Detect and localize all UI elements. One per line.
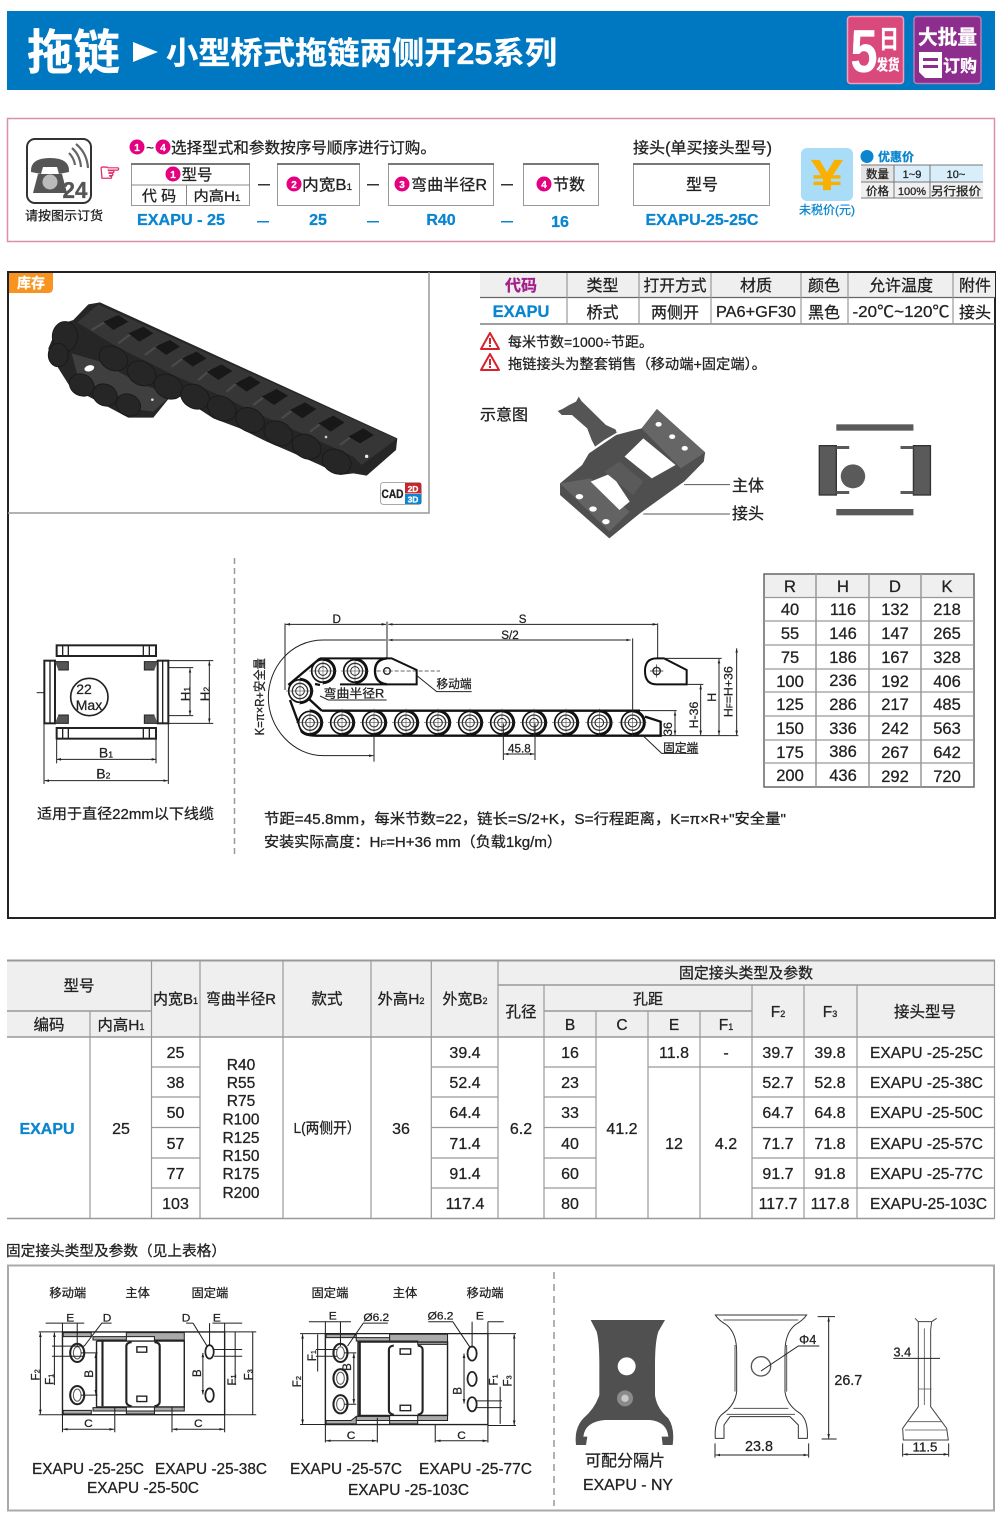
size table R H D K: 386 — [829, 743, 857, 761]
specification table: 附件 — [959, 277, 991, 295]
table body text: 117.8 — [811, 1196, 850, 1213]
table body text: 23 — [561, 1075, 579, 1092]
table body text: 77 — [167, 1166, 184, 1183]
instruction line: 4 — [160, 143, 166, 154]
size table R H D K: 55 — [781, 625, 799, 643]
table body text: 103 — [162, 1196, 189, 1213]
note 2 with warning icon: 拖链接头为整套销售（移动端+固定端）。 — [508, 356, 766, 372]
size table R H D K: 406 — [933, 673, 961, 691]
note 1 with warning icon: 每米节数=1000÷节距。 — [508, 334, 653, 350]
formula note 2: 安装实际高度：H F=H+36 mm（负载1kg/m） — [264, 834, 562, 851]
connector drawing: two-hole type: F1 — [226, 1374, 239, 1385]
icon: CAD 2D 3D: 3D — [408, 494, 418, 504]
table body text: 64.8 — [814, 1105, 846, 1122]
separator label: 可配分隔片 — [585, 1452, 665, 1470]
cross-section dimension drawing: H2 — [197, 687, 212, 701]
icon: CAD 2D 3D: 2D — [408, 484, 418, 494]
table body text: 91.4 — [449, 1166, 481, 1183]
size table R H D K: 150 — [776, 720, 804, 738]
connector drawing: two-hole type: E — [66, 1312, 74, 1324]
connector models group 1 — [32, 1461, 267, 1497]
step 3 box: bend radius: 3 — [399, 180, 405, 191]
connector heading: 接头(单买接头型号) — [633, 139, 772, 157]
table body text: EXAPU -25-38C — [870, 1075, 983, 1092]
connector drawing: two-hole type: C — [84, 1417, 93, 1430]
connector models group 1: EXAPU -25-38C — [155, 1461, 267, 1478]
table body text: R75 — [227, 1093, 255, 1110]
connector drawing: three-hole type: E — [476, 1310, 484, 1323]
connector drawing: three-hole type: F1 — [306, 1350, 319, 1361]
table body text: EXAPU -25-50C — [870, 1105, 983, 1122]
size table R H D K: 167 — [881, 649, 909, 667]
step 1 box: model — [131, 164, 250, 206]
example values: EXAPU - 25 — [137, 212, 225, 229]
connector drawing: three-hole type: Ø6.2 — [428, 1310, 453, 1323]
table body text: 41.2 — [606, 1121, 638, 1138]
specification table: 类型 — [586, 277, 619, 295]
table body text: R175 — [222, 1166, 260, 1183]
step 1 box: model: 1 — [170, 170, 176, 181]
table body text: 71.7 — [762, 1136, 794, 1153]
step 2 box: inner width — [277, 164, 360, 206]
table header text: 内宽B1 — [153, 991, 198, 1008]
connector drawing: three-hole type: 移动端 — [467, 1286, 503, 1300]
size table R H D K: 132 — [881, 601, 909, 619]
icon: telephone 24h — [27, 139, 91, 203]
table header text: 弯曲半径R — [206, 991, 276, 1008]
table body text: EXAPU -25-57C — [870, 1136, 983, 1153]
step 4 box: link count: 4 — [541, 180, 547, 191]
size table R H D K: 267 — [881, 744, 909, 762]
arrow — [133, 42, 158, 62]
connector drawing: two-hole type: C — [194, 1417, 203, 1430]
schematic label: 示意图 — [480, 405, 528, 424]
table header text: F3 — [823, 1004, 837, 1021]
table body text: 4.2 — [715, 1136, 737, 1153]
table header text: 编码 — [33, 1016, 65, 1034]
table body text: R40 — [227, 1057, 256, 1074]
size table R H D K: 242 — [881, 720, 909, 738]
table body text: EXAPU — [19, 1121, 75, 1138]
specification table: 颜色 — [808, 277, 840, 295]
table body text: L(两侧开） — [294, 1120, 360, 1137]
connector drawing: three-hole type: F1 — [488, 1374, 501, 1385]
size table R H D K: 642 — [933, 744, 961, 762]
connector drawing: two-hole type: 固定端 — [191, 1285, 228, 1300]
table header text: 型号 — [63, 977, 95, 995]
chain side view dimension drawing: S/2 — [501, 629, 519, 642]
table body text: 39.8 — [814, 1045, 846, 1062]
step 3 box: bend radius: 弯曲半径R — [411, 176, 487, 194]
table header text: 孔距 — [633, 991, 663, 1008]
table body text — [19, 1045, 987, 1213]
exploded connector illustration — [558, 397, 730, 538]
table body text: 117.7 — [759, 1196, 798, 1213]
table body text: 11.8 — [659, 1045, 689, 1062]
discount table: 1~9 — [903, 169, 921, 181]
chain side view dimension drawing: S — [519, 613, 527, 626]
chain side view dimension drawing — [252, 613, 738, 762]
table body text: 64.7 — [762, 1105, 794, 1122]
cross-section dimension drawing: B2 — [96, 766, 111, 782]
size table R H D K: 336 — [829, 720, 857, 738]
discount table: 价格 — [866, 184, 889, 198]
specification table: 打开方式 — [644, 277, 706, 295]
dash — [258, 184, 270, 186]
size table R H D K: 75 — [781, 649, 799, 667]
separator label: EXAPU - NY — [583, 1477, 673, 1494]
step 1 box: model: 型号 — [181, 166, 213, 184]
chain side view dimension drawing: H-36 — [687, 702, 701, 728]
product photo frame — [8, 272, 429, 513]
size table R H D K: 217 — [881, 696, 909, 714]
step 4 box: link count — [523, 164, 599, 206]
example values: 16 — [551, 214, 569, 231]
step 3 box: bend radius — [388, 164, 494, 206]
size table R H D K: 200 — [776, 767, 804, 785]
example values: 25 — [309, 212, 327, 229]
table header text: B — [565, 1017, 575, 1034]
size table R H D K: 192 — [881, 673, 909, 691]
table body text: EXAPU -25-25C — [870, 1045, 983, 1062]
badge: bulk order — [914, 16, 981, 84]
table body text: 52.4 — [449, 1075, 481, 1092]
badge: 5 day delivery: 日 — [879, 26, 899, 54]
connector drawing: two-hole type: D — [103, 1312, 111, 1324]
badge: bulk order: 大批量 — [918, 26, 977, 49]
connector models group 2: EXAPU -25-57C — [290, 1461, 402, 1478]
label: body: 主体 — [732, 477, 764, 495]
size table R H D K: 116 — [830, 601, 856, 619]
separator label — [583, 1452, 673, 1494]
size table R H D K: 100 — [776, 673, 804, 691]
chain side view dimension drawing: 弯曲半径R — [324, 686, 384, 700]
size table R H D K: 236 — [829, 672, 857, 690]
step 4 box: link count: 节数 — [553, 176, 585, 194]
table body text: 12 — [665, 1136, 683, 1153]
cross-section dimension drawing — [37, 645, 213, 784]
tax-excluded label: 未税价(元) — [799, 203, 855, 217]
size table R H D K: 125 — [776, 696, 804, 714]
specification table: 黑色 — [808, 304, 840, 322]
table body text: 60 — [561, 1166, 579, 1183]
icon: yen price: ¥ — [811, 151, 844, 200]
table body text: 25 — [167, 1045, 184, 1062]
discount table — [860, 149, 983, 198]
size table R H D K — [764, 574, 974, 787]
connector drawing: two-hole type: B — [191, 1369, 204, 1377]
connector drawing: three-hole type: Ø6.2 — [363, 1311, 389, 1324]
size table R H D K: 292 — [881, 768, 909, 786]
header banner — [7, 11, 995, 90]
table body text: EXAPU -25-77C — [870, 1166, 983, 1183]
connector drawing: three-hole type: 主体 — [393, 1286, 417, 1300]
step 1 box: model: 内高H 1 — [194, 188, 240, 204]
size table R H D K: 40 — [781, 601, 799, 619]
connector model box — [633, 164, 770, 206]
table header text: 内高H1 — [98, 1017, 144, 1034]
connector drawing: two-hole type: F2 — [29, 1369, 42, 1380]
stock tag: 库存 — [17, 275, 45, 291]
size table R H D K: 175 — [776, 744, 804, 762]
chain side view dimension drawing: 45.8 — [508, 742, 531, 755]
size table R H D K: 720 — [933, 768, 961, 786]
separator side view drawing: 11.5 — [913, 1440, 937, 1455]
subtitle: 小型桥式拖链两侧开25系列 — [166, 36, 557, 71]
size table R H D K: 436 — [829, 767, 857, 785]
size table R H D K: 485 — [933, 696, 961, 714]
discount table: 数量 — [866, 167, 889, 181]
size table R H D K: 146 — [829, 625, 857, 643]
connector models group 1: EXAPU -25-50C — [87, 1480, 199, 1497]
chain side view dimension drawing: H — [705, 693, 719, 702]
connector models group 2 — [290, 1461, 532, 1499]
table body text: 80 — [561, 1196, 579, 1213]
connector drawing: three-hole type: E — [329, 1310, 337, 1323]
size table R H D K: 286 — [829, 696, 857, 714]
table body text: - — [723, 1045, 729, 1062]
table body text: 39.7 — [762, 1045, 794, 1062]
table body text: 50 — [167, 1105, 184, 1122]
step 1 box: model: 代 码 — [142, 188, 176, 205]
label: connector: 接头 — [732, 505, 764, 523]
table header text: E — [669, 1017, 679, 1034]
connector drawing: two-hole type: E — [213, 1312, 221, 1324]
cable size note: 适用于直径22mm以下线缆 — [37, 806, 214, 823]
separator front view drawing: 26.7 — [834, 1373, 862, 1389]
size table R H D K: 563 — [933, 720, 961, 738]
chain side view dimension drawing: 固定端 — [663, 741, 698, 755]
panel: ordering guide — [8, 118, 994, 242]
table body text: 117.4 — [446, 1196, 485, 1213]
table body text: R200 — [222, 1185, 260, 1202]
table header text: 接头型号 — [894, 1003, 956, 1021]
panel: connector details — [8, 1266, 994, 1510]
discount table: 另行报价 — [931, 184, 982, 198]
table body text: 40 — [561, 1136, 579, 1153]
table body text: 71.4 — [449, 1136, 481, 1153]
chain side view dimension drawing: 36 — [661, 722, 675, 736]
discount table: 10~ — [947, 169, 965, 181]
connector drawing: three-hole type — [291, 1285, 516, 1442]
example values — [137, 212, 759, 231]
specification table: 材质 — [740, 277, 772, 295]
instruction line: 1 — [134, 143, 140, 154]
size table R H D K: 147 — [881, 625, 909, 643]
chain side view dimension drawing: 移动端 — [437, 678, 472, 691]
cross-section dimension drawing: B1 — [99, 744, 113, 760]
cross-section dimension drawing: H1 — [178, 687, 193, 701]
badge: bulk order: 订购 — [943, 57, 977, 76]
photo: drag chain — [48, 302, 397, 479]
size table R H D K: K — [941, 578, 953, 596]
table body text: 16 — [561, 1045, 579, 1062]
cross-section dimension drawing: Max — [76, 697, 102, 713]
specification table: 允许温度 — [869, 277, 933, 295]
step 2 box: inner width: 2 — [291, 180, 297, 191]
table body text: R125 — [222, 1130, 260, 1147]
connector model box: 型号 — [686, 176, 718, 194]
connector drawing: two-hole type: 主体 — [125, 1286, 150, 1300]
dash — [501, 184, 513, 186]
connector models group 2: EXAPU -25-77C — [419, 1461, 532, 1478]
formula note 1: 节距=45.8mm，每米节数=22，链长=S/2+K，S=行程距离，K=π×R+"安全量" — [264, 810, 786, 828]
table header text: 固定接头类型及参数 — [679, 965, 813, 982]
connector models group 2: EXAPU -25-103C — [348, 1482, 469, 1499]
table body text: 71.8 — [814, 1136, 846, 1153]
table body text: 91.7 — [762, 1166, 794, 1183]
connector drawing: three-hole type: B — [451, 1387, 465, 1395]
specification table: -20℃~120℃ — [852, 304, 950, 321]
table body text: 57 — [167, 1136, 184, 1153]
table body text: 52.7 — [762, 1075, 794, 1092]
panel: product overview — [8, 272, 995, 918]
size table R H D K: R — [784, 578, 796, 596]
instruction line: ~ — [146, 140, 154, 155]
separator side view drawing: 3.4 — [894, 1345, 911, 1359]
separator front view drawing: Φ4 — [799, 1333, 816, 1347]
specification table: EXAPU — [493, 303, 549, 321]
example values: EXAPU-25-25C — [646, 212, 759, 229]
specification table: 接头 — [959, 304, 991, 322]
separator front view drawing — [715, 1315, 862, 1458]
specification table — [480, 273, 995, 324]
connector drawing: two-hole type: F1 — [43, 1374, 56, 1385]
icon: pointing hand: ☞ — [99, 158, 121, 187]
example values: R40 — [426, 212, 456, 229]
cross-section dimension drawing: 22 — [76, 681, 92, 697]
table body text: EXAPU-25-103C — [870, 1196, 987, 1213]
size table R H D K: 328 — [933, 649, 961, 667]
connector drawing: three-hole type: 固定端 — [312, 1285, 348, 1300]
specification table: PA6+GF30 — [716, 304, 796, 321]
connector section heading: 固定接头类型及参数（见上表格） — [6, 1243, 226, 1260]
icon: order sheet — [919, 52, 942, 78]
icon: CAD 2D 3D — [380, 482, 422, 504]
table body text: 38 — [167, 1075, 184, 1092]
title: 拖链 — [27, 27, 120, 80]
size table R H D K: 186 — [829, 649, 857, 667]
discount table: 100% — [898, 186, 926, 198]
connector drawing: two-hole type — [29, 1285, 256, 1432]
connector drawing: three-hole type: B — [341, 1363, 354, 1371]
size table R H D K: 218 — [933, 601, 961, 619]
table body text: 64.4 — [449, 1105, 481, 1122]
cross-section illustration — [819, 424, 930, 515]
icon label: 请按图示订货 — [25, 208, 103, 223]
table body text: 52.8 — [814, 1075, 846, 1092]
size table R H D K: D — [889, 578, 901, 596]
connector drawing: three-hole type: C — [457, 1429, 466, 1442]
table body text: 39.4 — [449, 1045, 481, 1062]
table body text: R55 — [227, 1075, 255, 1092]
separator front view drawing: 23.8 — [745, 1439, 773, 1455]
specification table: 代码 — [505, 277, 537, 295]
chain side view dimension drawing: K=π×R+安全量 — [252, 658, 267, 735]
connector models group 1: EXAPU -25-25C — [32, 1461, 144, 1478]
table body text: 33 — [561, 1105, 579, 1122]
table body text: 25 — [112, 1121, 130, 1138]
parameter table — [7, 960, 995, 1218]
table header text: C — [616, 1017, 628, 1034]
table header text: 款式 — [311, 990, 343, 1008]
dash — [367, 184, 379, 186]
size table R H D K: H — [837, 578, 849, 596]
discount table: 优惠价 — [878, 149, 914, 164]
instruction line: 选择型式和参数按序号顺序进行订购。 — [171, 139, 436, 157]
badge: 5 day delivery: 发货 — [876, 56, 900, 74]
specification table: 两侧开 — [651, 304, 699, 322]
connector drawing: two-hole type: F3 — [243, 1369, 256, 1380]
photo: separator piece — [576, 1320, 673, 1445]
table header text: 外高H2 — [378, 991, 424, 1008]
icon: telephone 24h: 24 — [62, 177, 88, 203]
table body text: 91.8 — [814, 1166, 846, 1183]
icon: CAD 2D 3D: CAD — [382, 489, 404, 501]
table header text — [33, 965, 956, 1034]
connector drawing: two-hole type: D — [182, 1312, 190, 1324]
table body text: R150 — [222, 1148, 260, 1165]
connector drawing: three-hole type: F3 — [502, 1375, 515, 1387]
size table R H D K: 265 — [933, 625, 961, 643]
table header text: 外宽B2 — [442, 991, 488, 1008]
specification table: 桥式 — [586, 304, 619, 322]
stock tag — [9, 273, 53, 293]
badge: 5 day delivery — [848, 16, 904, 85]
table body text: R100 — [222, 1112, 260, 1128]
chain side view dimension drawing: D — [332, 613, 341, 626]
chain side view dimension drawing: HF=H+36 — [722, 666, 736, 717]
step 2 box: inner width: 内宽B 1 — [302, 176, 352, 194]
table header text: F2 — [771, 1004, 785, 1021]
separator side view drawing — [893, 1318, 949, 1457]
table body text: 36 — [392, 1121, 410, 1138]
connector drawing: three-hole type: F2 — [291, 1376, 304, 1387]
table body text: 6.2 — [510, 1121, 532, 1138]
table header text: F1 — [719, 1017, 733, 1034]
table header text: 孔径 — [505, 1003, 537, 1021]
connector drawing: two-hole type: 移动端 — [49, 1286, 86, 1300]
connector drawing: three-hole type: C — [347, 1429, 355, 1442]
connector drawing: two-hole type: B — [83, 1370, 96, 1378]
icon: yen price — [801, 148, 853, 201]
badge: 5 day delivery: 5 — [850, 18, 878, 85]
